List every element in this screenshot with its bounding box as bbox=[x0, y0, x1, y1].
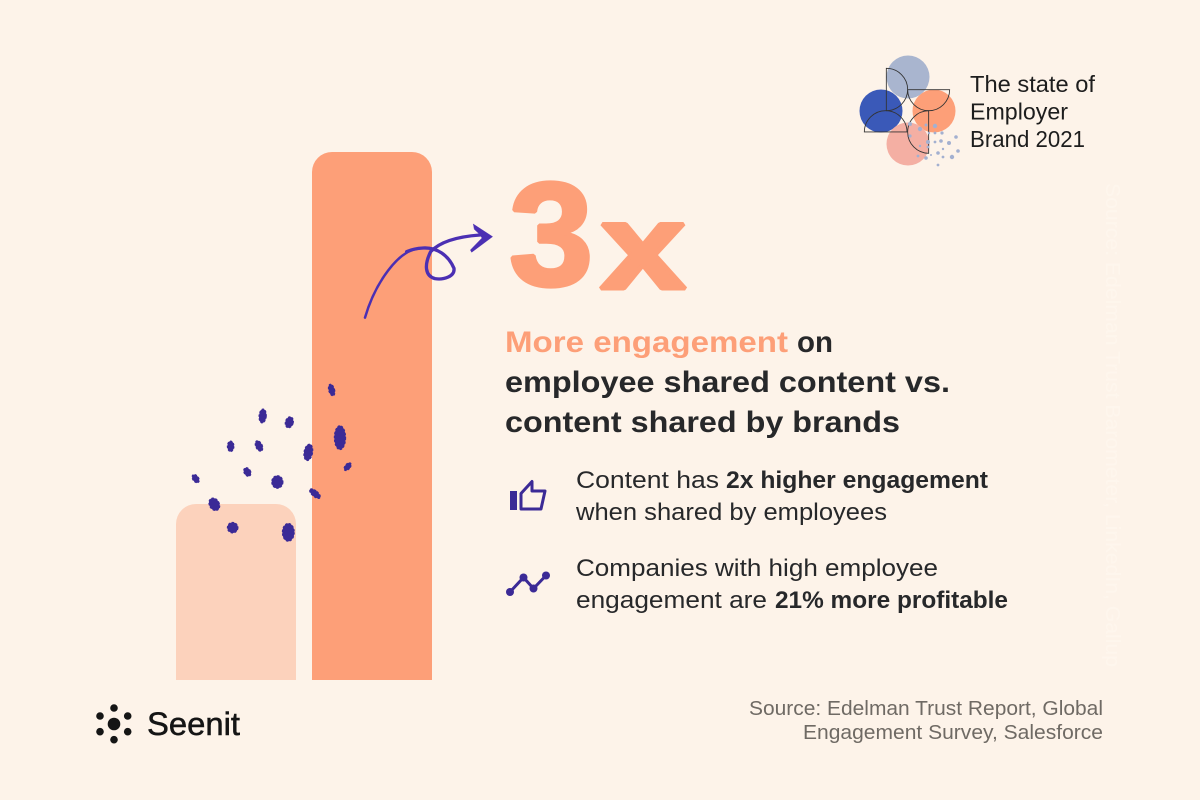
text: more profitable: engagement are bbox=[576, 587, 767, 614]
emblem speckles bbox=[908, 122, 960, 166]
headline: content shared by brands bbox=[505, 406, 900, 439]
Seenit logo bbox=[96, 704, 240, 744]
text: more profitable bbox=[576, 555, 1008, 614]
source note: Source: Edelman Trust Report, Global bbox=[749, 698, 1103, 720]
headline: on bbox=[797, 326, 833, 359]
hand-drawn arrow bbox=[365, 224, 493, 318]
text: more profitable: 21% more profitable bbox=[775, 587, 1008, 614]
big stat: 3x: 3 bbox=[509, 152, 593, 317]
report title: The state of bbox=[970, 71, 1096, 97]
faint vertical source text: Source: Edelman Trust Barometer, LinkedIn, Gallup bbox=[1101, 183, 1123, 667]
text: higher engagement: 2x higher engagement bbox=[726, 467, 988, 494]
report title bbox=[970, 71, 1096, 152]
big stat: 3x bbox=[509, 152, 686, 317]
source note bbox=[749, 698, 1103, 744]
text: more profitable: Companies with high employee bbox=[576, 555, 938, 582]
Seenit logo: Seenit bbox=[147, 706, 240, 742]
report title: Employer bbox=[970, 98, 1068, 124]
big stat: 3x: x bbox=[600, 178, 686, 315]
text: higher engagement bbox=[575, 467, 988, 526]
headline bbox=[505, 326, 950, 439]
bar: employee shared content bbox=[312, 152, 432, 680]
icon: thumbs up bbox=[510, 482, 545, 510]
text: higher engagement: Content has bbox=[576, 467, 719, 494]
headline: employee shared content vs. bbox=[505, 366, 950, 399]
icon: trend line bbox=[506, 572, 550, 596]
headline: More engagement bbox=[505, 326, 788, 359]
paint splatter bbox=[191, 383, 353, 541]
report title: Brand 2021 bbox=[970, 126, 1085, 152]
source note: Engagement Survey, Salesforce bbox=[803, 722, 1103, 744]
emblem: state of employer brand bbox=[860, 56, 960, 166]
emblem line art bbox=[864, 68, 950, 153]
text: higher engagement: when shared by employees bbox=[575, 499, 887, 526]
bar: brand shared content bbox=[176, 504, 296, 680]
